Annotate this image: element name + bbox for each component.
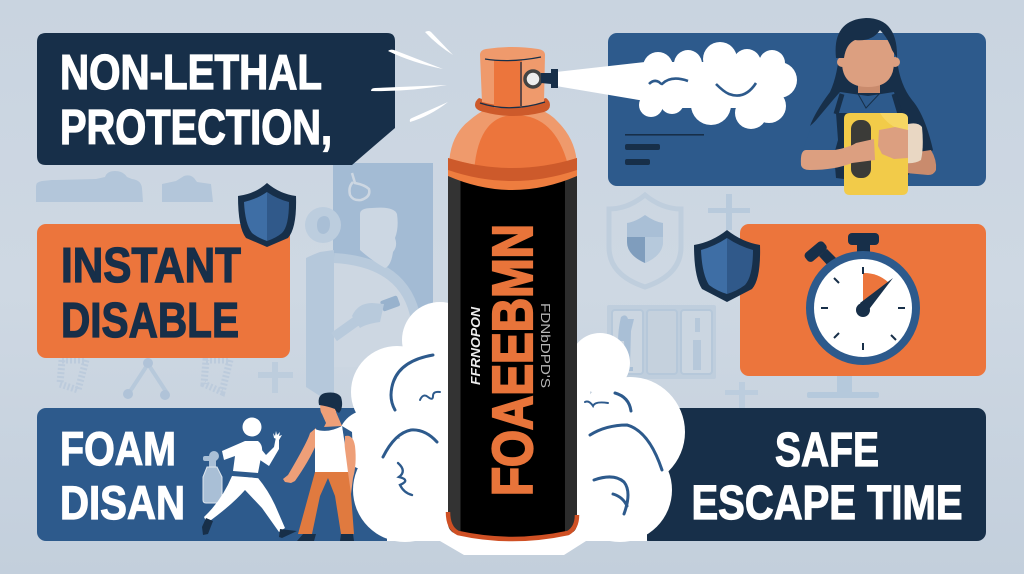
running figure with spray bottle [202,418,297,538]
panel: blue spray scene [608,33,986,186]
panel: safe escape time [640,408,986,541]
hands and near arm [801,139,875,170]
person holding yellow canister [801,18,936,195]
icon: spray foam cloud [639,42,797,129]
foam cloud at base of can [338,302,685,555]
heading: safe escape time: SAFE [775,424,879,477]
neck and face [858,82,880,93]
icon: shield right [694,230,760,302]
can small label right: FDNbDPD'S [538,303,553,388]
icon: spray cone [556,62,645,101]
heading: safe escape time [692,424,962,530]
foam curl strokes [383,355,662,514]
panel: stopwatch [740,224,986,376]
icon: shield left [238,183,296,247]
spray bottle [203,451,222,503]
hair back [810,45,933,180]
heading: non-lethal protection: NON-LETHAL [60,46,322,100]
panel: non-lethal protection [37,33,395,165]
heading: safe escape time: ESCAPE TIME [692,477,962,530]
heading: foam disan [60,422,185,529]
can main label: FOAEEBMN [481,224,545,496]
panel: foam disan [37,408,437,541]
far forearm [905,150,936,175]
can dome [449,110,577,165]
icon: spray motion rays [371,31,453,122]
panel: instant disable [37,224,290,358]
collar [475,98,550,116]
icon: stopwatch [803,233,916,361]
shirt [802,92,900,158]
background ghost icons: right [607,194,879,410]
standing figure [283,392,356,541]
heading: non-lethal protection [60,46,332,155]
heading: instant disable: DISABLE [61,294,239,348]
heading: instant disable: INSTANT [61,239,241,293]
nozzle [525,71,541,87]
heading: non-lethal protection: PROTECTION, [60,101,332,155]
cap [480,47,545,106]
background ghost icons: left [36,171,293,400]
heading: instant disable [61,239,241,348]
heading: foam disan: DISAN [60,476,185,529]
spray text lines [625,134,704,165]
can body [448,170,577,538]
cloth [905,123,923,163]
icon: spray can [448,47,577,539]
background ghost figure: door and wheel [305,163,433,405]
can shoulder band [448,158,577,190]
heading: foam disan: FOAM [60,422,176,475]
canister [844,113,908,195]
can small label left: FFRNOPON [468,306,483,385]
can base ring [448,512,577,539]
